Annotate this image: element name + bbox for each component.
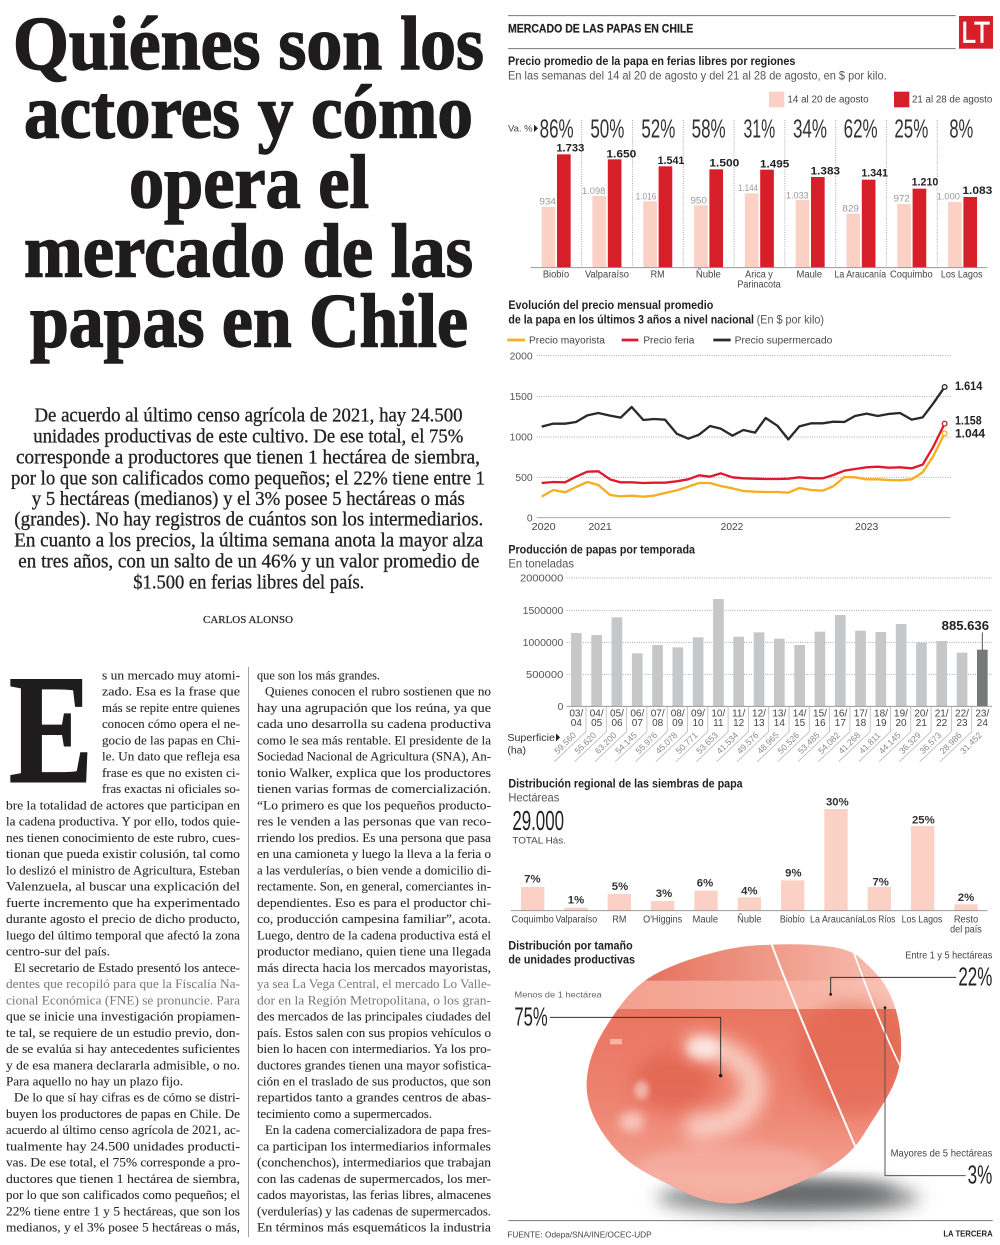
- season labels: 10: [692, 718, 704, 729]
- superficie label: [507, 733, 560, 756]
- text block: column 2: Quienes conocen el rubro sostienen que no: [265, 684, 491, 699]
- title: papas en Chile: [30, 280, 468, 364]
- season labels: 11/: [732, 709, 745, 720]
- text block: column 1: zado. Esa es la frase que: [102, 684, 240, 699]
- text block: column 2: dor en la Región Metropolitana, o los gran-: [257, 992, 491, 1007]
- season labels: 23/: [975, 709, 989, 720]
- hectare values: 45.078: [653, 730, 679, 756]
- percentages: 2%: [958, 892, 974, 904]
- text block: column 1: vas. De ese total, el 75% corresponde a pro-: [6, 1155, 240, 1170]
- text block: column 2: más directa hacia los mercados mayoristas,: [257, 960, 491, 975]
- variation percentages: 86%: [540, 113, 574, 143]
- hectare values: 53.485: [796, 730, 822, 756]
- chart heading: Distribución regional de las siembras de papa: [508, 778, 743, 791]
- hectare values: 55.976: [633, 730, 659, 756]
- hectare values: 53.653: [694, 730, 720, 756]
- text block: column 2: país. Estos salen con sus propios vehículos o: [257, 1025, 491, 1040]
- text block: column 2: ca participan los intermediarios informales: [257, 1138, 491, 1154]
- percentages: 7%: [872, 877, 889, 889]
- text block: column 2: repartidos tanto a grandes centros de abas-: [257, 1090, 491, 1105]
- legend: [769, 92, 993, 107]
- x axis labels: 2022: [721, 522, 744, 533]
- text block: column 1: centro-sur del país.: [6, 944, 110, 959]
- region labels: Ñuble: [737, 913, 762, 926]
- text block: column 1: [6, 668, 241, 1235]
- variation label: Va. %: [508, 124, 533, 134]
- end markers and values: 1.614: [955, 380, 983, 393]
- hectare values: 55.620: [572, 730, 598, 756]
- lede paragraph: corresponde a productores que tienen 1 hectárea de siembra,: [16, 447, 480, 468]
- text block: column 2: En términos más esquemáticos la industria: [257, 1220, 491, 1235]
- variation percentages: 50%: [590, 113, 624, 143]
- lede paragraph: En cuanto a los precios, la última semana anota la mayor alza: [14, 531, 484, 552]
- text block: column 2: ción en el traslado de sus productos, que son: [257, 1074, 491, 1088]
- callout: entre 1 y 5 hectáreas: Entre 1 y 5 hectáreas: [905, 950, 992, 961]
- text block: column 1: luego del último temporal que afectó la zona: [6, 927, 240, 942]
- values: 21 al 28 de agosto: 1.500: [709, 158, 739, 170]
- panel: producción de papas por temporada: [507, 543, 992, 762]
- chart heading: Evolución del precio mensual promedio: [508, 299, 713, 312]
- total hectares: 29.000: [512, 805, 564, 836]
- chart heading: (En $ por kilo): [757, 314, 824, 327]
- chart heading: En toneladas: [508, 558, 574, 571]
- season labels: 06: [611, 718, 623, 729]
- season labels: 08/: [671, 709, 685, 720]
- chart heading: [508, 778, 743, 805]
- text block: column 2: dependientes. Eso es para el productor chi-: [257, 895, 491, 910]
- variation percentages: 34%: [793, 113, 827, 143]
- region labels: O'Higgins: [643, 915, 682, 926]
- region labels: Biobío: [543, 270, 570, 281]
- panel: precio promedio por regiones: [508, 55, 993, 290]
- region labels: Los Lagos: [902, 915, 942, 926]
- values: 21 al 28 de agosto: 1.650: [606, 148, 636, 160]
- hectare values: 36.329: [897, 730, 923, 756]
- text block: column 1: le. Un dato que refleja esa: [102, 749, 240, 764]
- text block: column 1: tualmente hay 24.500 unidades producti-: [6, 1138, 240, 1154]
- y axis labels: 1000: [510, 433, 533, 444]
- variation percentages: [540, 113, 973, 143]
- y axis labels: 0: [558, 702, 564, 713]
- title: opera el: [129, 140, 369, 224]
- text block: column 1: buyen los productores de papas en Chile. De: [6, 1106, 240, 1121]
- text block: column 1: de se evalúa si hay antecedentes suficientes: [6, 1041, 240, 1056]
- panel: evolución del precio mensual: [507, 299, 986, 533]
- text block: column 1: bre la totalidad de actores que participan en: [6, 797, 241, 812]
- region labels: Ñuble: [696, 268, 721, 281]
- chart subheading: En las semanas del 14 al 20 de agosto y del 21 al 28 de agosto, en $ por kilo.: [508, 69, 887, 82]
- text block: column 1: gocio de las papas en Chi-: [102, 732, 240, 748]
- values: 14 al 20 de agosto: 950: [690, 195, 707, 205]
- bar chart: production: [567, 599, 992, 706]
- season labels: 13: [753, 718, 765, 729]
- percentages: 9%: [785, 868, 802, 880]
- values: 14 al 20 de agosto: 934: [539, 197, 556, 207]
- text block: column 2: des mercados de las principales ciudades del: [257, 1008, 491, 1024]
- hectare values: [552, 730, 984, 756]
- text block: column 1: la cadena productiva. Y por ello, todos quie-: [6, 814, 240, 829]
- percentages: 3%: [656, 888, 672, 900]
- season labels: 16: [814, 718, 826, 729]
- title: [13, 2, 484, 364]
- end markers and values: [942, 380, 986, 441]
- region labels: Coquimbo: [511, 915, 554, 926]
- callout: menos de 1 hectárea: Menos de 1 hectárea: [514, 989, 602, 999]
- hectare values: 44.145: [877, 730, 903, 756]
- text block: column 1: fras exactas ni oficiales so-: [102, 781, 240, 796]
- season labels: 16/: [833, 709, 847, 720]
- text block: column 1: te tal, se requiere de un estudio previo, don-: [6, 1025, 240, 1040]
- variation percentages: 25%: [894, 113, 928, 143]
- text block: column 1: ductores que tienen 1 hectárea de siembra,: [6, 1171, 240, 1186]
- text block: column 2: Sociedad Nacional de Agricultura (SNA), An-: [257, 749, 491, 764]
- values: 21 al 28 de agosto: [556, 143, 992, 197]
- source: FUENTE: Odepa/SNA/INE/OCEC-UDP: [507, 1229, 652, 1239]
- lede paragraph: (grandes). No hay registros de cuántos son los intermediarios.: [14, 510, 483, 531]
- panel: distribución por tamaño: [507, 939, 993, 1239]
- bar chart: regional: [511, 809, 987, 911]
- lede paragraph: De acuerdo al último censo agrícola de 2021, hay 24.500: [34, 406, 462, 427]
- text block: column 1: y de esa manera declararla admisible, o no.: [6, 1057, 240, 1072]
- y axis labels: 1500000: [523, 606, 564, 617]
- text block: column 1: 22% tiene entre 1 y 5 hectáreas, que son los: [6, 1203, 240, 1218]
- callout: 885.636: [942, 619, 989, 650]
- text block: column 2: cados mayoristas, las ferias libres, almacenes: [257, 1187, 491, 1202]
- text block: column 1: s un mercado muy atomi-: [102, 668, 240, 682]
- text block: column 2: tonio Walker, explica que los productores: [257, 765, 491, 780]
- season labels: 13/: [772, 709, 786, 720]
- season labels: 07/: [651, 709, 665, 720]
- season labels: 03/: [569, 709, 583, 720]
- text block: column 2: tecimiento como a supermercados.: [257, 1106, 432, 1121]
- lede paragraph: y 5 hectáreas (medianos) y el 3% posee 5 hectáreas o más: [32, 489, 465, 510]
- values: 21 al 28 de agosto: 1.341: [861, 168, 888, 180]
- text block: column 2: Luego, dentro de la cadena productiva está el: [257, 927, 491, 942]
- text block: column 2: rriendo los predios. Es una persona que pasa: [257, 830, 491, 845]
- text block: column 2: en una camioneta y luego la lleva a la feria o: [257, 846, 491, 861]
- text block: column 2: con las cadenas de supermercados, los mer-: [257, 1171, 491, 1186]
- season labels: 20/: [914, 709, 928, 720]
- text block: column 1: durante agosto el precio de dicho producto,: [6, 911, 240, 926]
- y axis labels: 500: [515, 473, 533, 484]
- season labels: 11: [713, 718, 724, 729]
- hectare values: 50.771: [674, 730, 700, 756]
- line: precio feria: [542, 424, 945, 483]
- hectare values: 48.965: [755, 730, 781, 756]
- season labels: 18/: [874, 709, 888, 720]
- text block: column 2: rectamente. Son, en general, comerciantes in-: [257, 879, 491, 894]
- legend: Precio mayorista: [529, 335, 605, 346]
- y axis labels: 1500: [510, 392, 533, 403]
- x axis labels: 2020: [532, 522, 556, 533]
- hectare values: 41.534: [714, 730, 740, 756]
- section heading: MERCADO DE LAS PAPAS EN CHILE: [508, 21, 693, 35]
- season labels: 18: [855, 718, 867, 729]
- end markers and values: 1.158: [955, 414, 982, 427]
- callout: mayores de 5 hectáreas: [884, 1006, 992, 1190]
- values: 21 al 28 de agosto: 1.495: [760, 158, 789, 170]
- drop cap: E: [9, 644, 93, 816]
- region labels: Valparaíso: [555, 915, 598, 926]
- title: mercado de las: [24, 210, 473, 294]
- text block: column 1: De lo que sí hay cifras es de cómo se distri-: [14, 1090, 240, 1105]
- season labels: 15: [794, 718, 806, 729]
- chart heading: de unidades productivas: [508, 954, 635, 967]
- region labels: Arica y: [745, 270, 773, 281]
- region labels: La Araucanía: [810, 915, 863, 926]
- bar chart: prices by region: [531, 154, 987, 268]
- text block: column 1: nes tienen conocimiento de este rubro, cues-: [6, 830, 240, 845]
- text block: column 2: “Lo primero es que los pequeños producto-: [257, 797, 491, 812]
- hectare values: 59.560: [552, 730, 578, 756]
- season labels: 09: [672, 718, 684, 729]
- season labels: 04: [571, 718, 582, 729]
- percentages: 1%: [568, 894, 584, 906]
- values: 14 al 20 de agosto: 972: [894, 193, 910, 203]
- text block: column 2: que son los más grandes.: [257, 668, 380, 682]
- season labels: 17/: [854, 709, 868, 720]
- hectare values: 31.452: [958, 730, 984, 756]
- superficie label: Superficie: [507, 733, 555, 744]
- region labels: Maule: [796, 270, 823, 281]
- season labels: 14/: [793, 709, 807, 720]
- chart heading: [508, 299, 824, 327]
- region labels: Coquimbo: [890, 270, 933, 281]
- values: 21 al 28 de agosto: 1.083: [962, 185, 992, 197]
- percentages: 30%: [826, 797, 849, 809]
- season labels: 09/: [691, 709, 705, 720]
- icon: LT logo: LT: [961, 17, 990, 50]
- text block: column 1: por lo que son calificados como pequeños; el: [6, 1187, 240, 1202]
- chart heading: Hectáreas: [508, 792, 559, 805]
- text block: column 1: conocen cómo opera el ne-: [102, 716, 240, 731]
- icon: shadow under potato: [657, 1181, 920, 1214]
- text block: column 2: co, producción campesina familiar”, acota.: [257, 911, 491, 926]
- season labels: 10/: [711, 709, 725, 720]
- hectare values: 49.576: [735, 730, 761, 756]
- chart heading: [508, 543, 695, 571]
- text block: column 1: acuerdo al último censo agrícola de 2021, ac-: [6, 1122, 240, 1137]
- text block: column 2: [257, 668, 492, 1235]
- text block: column 1: El secretario de Estado presentó los antece-: [14, 960, 240, 975]
- y axis labels: [510, 351, 533, 524]
- region labels: [543, 268, 982, 290]
- panel: header of infographic: [508, 16, 993, 50]
- season labels: [569, 709, 989, 729]
- percentages: 25%: [912, 814, 935, 826]
- legend: 14 al 20 de agosto: [787, 95, 869, 106]
- text block: column 2: como le sea más rentable. El presidente de la: [257, 732, 491, 748]
- season labels: 04/: [590, 709, 604, 720]
- text block: column 2: ya sea La Vega Central, el mercado Lo Valle-: [257, 976, 491, 991]
- season labels: 19: [875, 718, 887, 729]
- season labels: 14: [774, 718, 785, 729]
- callout: mayores de 5 hectáreas: Mayores de 5 hectáreas: [891, 1148, 992, 1159]
- superficie label: (ha): [507, 745, 526, 756]
- region labels: Los Ríos: [862, 915, 895, 926]
- hectare values: 41.811: [857, 730, 882, 756]
- text block: column 2: bien lo hacen con intermediarios. Ya los pro-: [257, 1041, 491, 1056]
- line: precio mayorista: [542, 433, 945, 497]
- byline: CARLOS ALONSO: [203, 615, 293, 626]
- text block: column 1: Valenzuela, al buscar una explicación del: [6, 879, 240, 894]
- region labels: Los Lagos: [941, 270, 982, 281]
- hectare values: 50.526: [775, 730, 801, 756]
- lede paragraph: $1.500 en ferias libres del país.: [133, 572, 364, 593]
- text block: column 2: a las verdulerías, o bien vende a domicilio di-: [257, 862, 491, 877]
- total hectares: TOTAL Hás.: [512, 835, 566, 845]
- y axis labels: 2000: [510, 351, 533, 362]
- season labels: 20: [895, 718, 907, 729]
- hectare values: 28.986: [938, 730, 964, 756]
- season labels: 22: [936, 718, 948, 729]
- values: 14 al 20 de agosto: 829: [842, 203, 859, 213]
- text block: column 1: tionan que pueda existir colusión, tal como: [6, 846, 240, 861]
- variation percentages: 62%: [844, 113, 878, 143]
- x axis labels: 2021: [588, 522, 612, 533]
- title: actores y cómo: [24, 71, 473, 155]
- y axis labels: 2000000: [520, 574, 564, 585]
- x axis labels: [532, 522, 879, 533]
- text block: column 1: más se repite entre quienes: [102, 700, 240, 715]
- lede paragraph: en tres años, con un salto de un 46% y un valor promedio de: [18, 552, 479, 573]
- text block: column 2: En la cadena comercializadora de papa fres-: [265, 1122, 491, 1137]
- hectare values: 63.200: [593, 730, 619, 756]
- variation percentages: 52%: [641, 113, 675, 143]
- text block: column 2: cada uno desarrolla su cadena productiva: [257, 716, 491, 731]
- season labels: 19/: [894, 709, 908, 720]
- values: 14 al 20 de agosto: 1.033: [786, 190, 809, 200]
- text block: column 2: ductores grandes tienen una mayor sofistica-: [257, 1057, 491, 1072]
- season labels: 22/: [955, 709, 969, 720]
- legend: 21 al 28 de agosto: [912, 95, 993, 106]
- season labels: 17: [835, 718, 846, 729]
- season labels: 12: [733, 718, 745, 729]
- season labels: 08: [652, 718, 664, 729]
- values: 14 al 20 de agosto: 1.098: [582, 186, 605, 196]
- lede paragraph: unidades productivas de este cultivo. De ese total, el 75%: [33, 427, 463, 448]
- region labels: [511, 913, 982, 935]
- percentages: 6%: [697, 878, 713, 890]
- region labels: La Araucanía: [834, 270, 887, 281]
- region labels: RM: [651, 270, 665, 281]
- y axis labels: 500000: [526, 670, 564, 681]
- title: Quiénes son los: [13, 2, 484, 86]
- season labels: 06/: [630, 709, 644, 720]
- text block: column 2: hay una agrupación que los reúna, ya que: [257, 700, 491, 715]
- callout: menos de 1 hectárea: 75%: [514, 1002, 548, 1032]
- percentages: 5%: [612, 881, 628, 893]
- icon: potato illustration: [580, 942, 910, 1206]
- values: 14 al 20 de agosto: 1.016: [636, 191, 656, 201]
- values: 21 al 28 de agosto: 1.383: [811, 166, 840, 178]
- region labels: del país: [950, 924, 982, 935]
- chart heading: Distribución por tamaño: [508, 939, 633, 952]
- season labels: 05: [591, 718, 603, 729]
- variation percentages: 8%: [949, 113, 973, 143]
- values: 14 al 20 de agosto: 1.144: [738, 183, 758, 193]
- region labels: Resto: [954, 915, 979, 926]
- text block: column 1: frase es que no existen ci-: [102, 765, 240, 780]
- hectare values: 36.573: [917, 730, 943, 756]
- values: 21 al 28 de agosto: 1.210: [912, 177, 938, 189]
- season labels: 24: [977, 718, 988, 729]
- legend: Precio supermercado: [735, 335, 833, 346]
- region labels: RM: [612, 915, 626, 926]
- text block: column 2: (verdulerías) y las cadenas de supermercados.: [257, 1203, 491, 1218]
- callout: menos de 1 hectárea: [514, 989, 722, 1077]
- percentages: [524, 797, 974, 906]
- text block: column 1: lo deslizó el ministro de Agricultura, Esteban: [6, 862, 240, 877]
- season labels: 07: [632, 718, 643, 729]
- y axis labels: [520, 574, 564, 713]
- percentages: 4%: [741, 885, 758, 897]
- y axis labels: 1000000: [523, 638, 564, 649]
- region labels: Biobío: [780, 915, 805, 926]
- text block: column 1: cional Económica (FNE) se pronuncie. Para: [6, 992, 240, 1007]
- text block: column 2: tienen varias formas de comercialización.: [257, 781, 491, 796]
- text block: column 2: productor mediano, quien tiene una llegada: [257, 944, 491, 959]
- text block: column 1: medianos, y el 3% posee 5 hectáreas o más,: [6, 1220, 240, 1235]
- panel: distribución regional: [508, 778, 987, 935]
- values: 14 al 20 de agosto: 1.000: [937, 191, 960, 201]
- hectare values: 41.268: [836, 730, 862, 756]
- region labels: Valparaíso: [585, 270, 629, 281]
- callout: 885.636: 885.636: [942, 619, 989, 633]
- season labels: 21: [916, 718, 927, 729]
- variation percentages: 31%: [743, 113, 775, 143]
- region labels: Parinacota: [737, 279, 781, 290]
- text block: column 1: Para aquello no hay un plazo fijo.: [6, 1074, 183, 1088]
- y axis labels: 0: [527, 513, 533, 524]
- callout: entre 1 y 5 hectáreas: [829, 950, 992, 996]
- hectare values: 54.145: [613, 730, 639, 756]
- text block: column 2: (conchenchos), intermediarios que trabajan: [257, 1155, 492, 1170]
- credit: LA TERCERA: [943, 1229, 993, 1239]
- line: precio supermercado: [542, 387, 945, 439]
- season labels: 12/: [752, 709, 766, 720]
- region labels: Maule: [692, 915, 719, 926]
- season labels: 23: [956, 718, 968, 729]
- values: 21 al 28 de agosto: 1.733: [556, 143, 584, 155]
- values: 14 al 20 de agosto: [539, 183, 960, 213]
- percentages: 7%: [524, 873, 541, 885]
- chart heading: Producción de papas por temporada: [508, 543, 695, 556]
- text block: column 1: dentes que recopiló para que la Fiscalía Na-: [6, 976, 240, 991]
- values: 21 al 28 de agosto: 1.541: [658, 155, 684, 167]
- lede paragraph: por lo que son calificados como pequeños; el 22% tiene entre 1: [11, 468, 485, 489]
- legend: [507, 335, 833, 346]
- text block: column 2: res le venden a las personas que van reco-: [257, 814, 491, 829]
- season labels: 15/: [813, 709, 827, 720]
- variation percentages: 58%: [692, 113, 726, 143]
- season labels: 21/: [935, 709, 949, 720]
- total hectares: [512, 805, 566, 845]
- end markers and values: 1.044: [955, 428, 986, 441]
- text block: column 1: fuerte incremento que ha experimentado: [6, 895, 240, 910]
- legend: Precio feria: [643, 335, 695, 346]
- lede paragraph: [11, 406, 485, 593]
- chart heading: [508, 939, 635, 967]
- season labels: 05/: [610, 709, 624, 720]
- text block: column 1: que se inicie una investigación propiamen-: [6, 1008, 240, 1024]
- chart heading: Precio promedio de la papa en ferias libres por regiones: [508, 55, 795, 68]
- x axis labels: 2023: [855, 522, 879, 533]
- chart heading: de la papa en los últimos 3 años a nivel nacional: [508, 314, 754, 327]
- hectare values: 54.082: [816, 730, 842, 756]
